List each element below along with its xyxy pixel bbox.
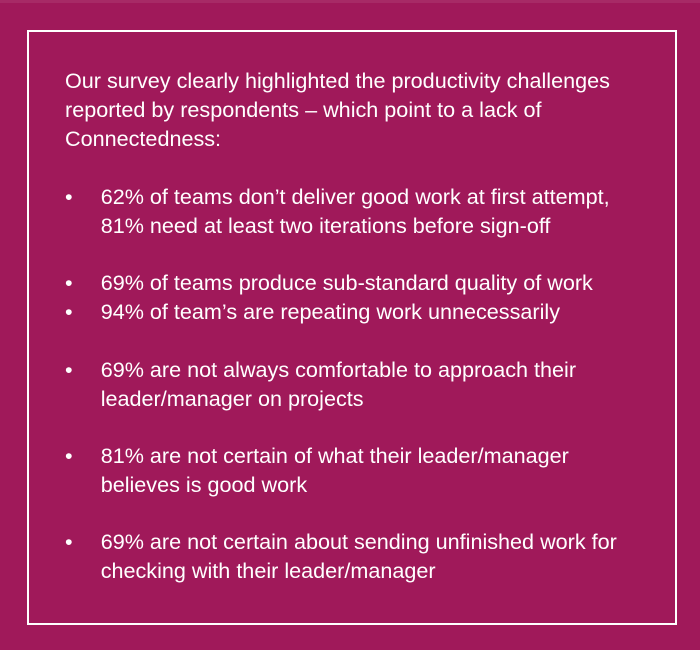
bullet: unfinished work: 69% are not certain about sending unfinished work for [101, 529, 617, 554]
bullet: sub-standard quality: 69% of teams produce sub-standard quality of work [101, 270, 593, 295]
bullet: certain of good work [65, 443, 569, 497]
bullet: repeating work: 94% of team’s are repeating work unnecessarily [101, 299, 560, 324]
bullet: comfortable to approach [65, 357, 576, 411]
intro text: Connectedness: [65, 126, 221, 151]
bullet: certain of good work: 81% are not certain of what their leader/manager [101, 443, 569, 468]
bullet: comfortable to approach: leader/manager on projects [101, 386, 364, 411]
bullet: sub-standard quality: • [65, 270, 73, 295]
bullet: unfinished work [65, 529, 617, 583]
bullet: first attempt: 81% need at least two iterations before sign-off [101, 213, 550, 238]
bullet: first attempt: 62% of teams don’t deliver good work at first attempt, [101, 184, 610, 209]
bullet: first attempt [65, 184, 610, 238]
bullet: unfinished work: • [65, 529, 73, 554]
bullet: comfortable to approach: • [65, 357, 73, 382]
intro text [65, 68, 610, 151]
bullet: repeating work: • [65, 299, 73, 324]
bullet: certain of good work: believes is good work [101, 472, 307, 497]
bullet: first attempt: • [65, 184, 73, 209]
bullet: certain of good work: • [65, 443, 73, 468]
bullet: comfortable to approach: 69% are not always comfortable to approach their [101, 357, 576, 382]
bullet: unfinished work: checking with their leader/manager [101, 558, 436, 583]
intro text: reported by respondents – which point to a lack of [65, 97, 542, 122]
intro text: Our survey clearly highlighted the productivity challenges [65, 68, 610, 93]
